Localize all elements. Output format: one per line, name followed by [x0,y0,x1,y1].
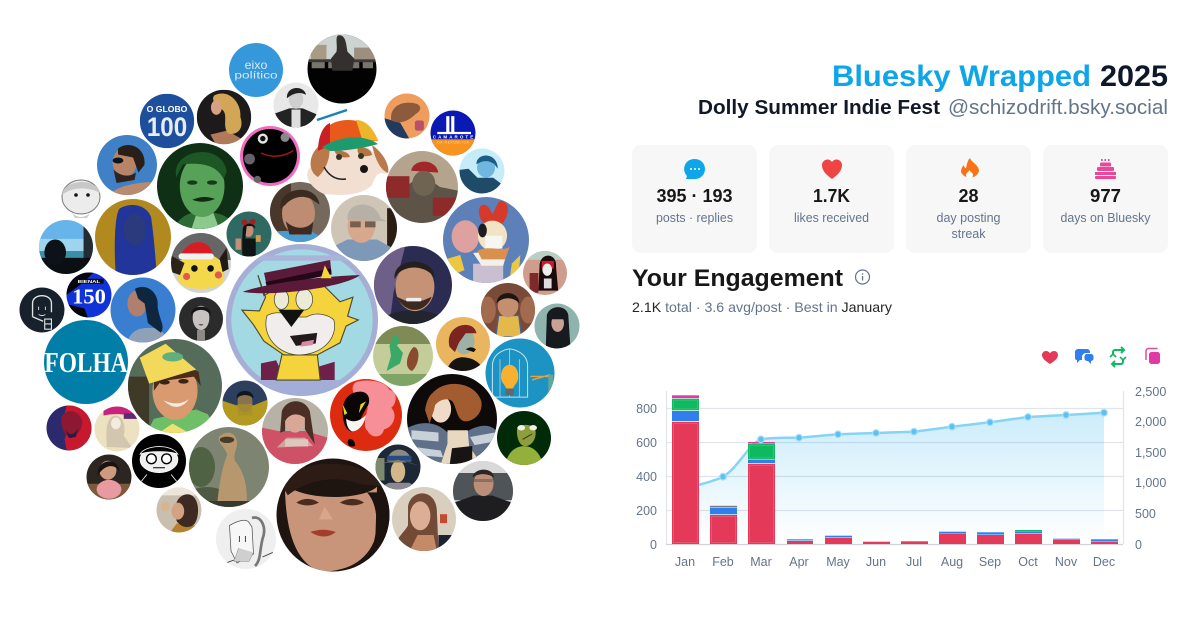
right axis labels: 500 [1135,507,1156,521]
avatar: dog with propeller cap [307,110,388,195]
icon: legend replies [1075,349,1094,364]
avatar: Camarote da Republica: CAMAROTE [433,134,473,139]
stat card: streak [906,145,1031,253]
stat card: streak: streak [952,226,986,241]
stat card: days on Bluesky: days on Bluesky [1060,210,1151,225]
avatar: Camarote da Republica [430,110,476,156]
avatar: pencil sketch of a man [216,509,276,569]
left axis labels: 800 [636,402,657,416]
icon: speech bubble [684,159,705,179]
icon: info [856,270,870,284]
stat card: likes: likes received [794,210,869,225]
avatar: green alien painting [373,326,433,386]
avatar: Pikachu with santa hat [171,233,231,293]
avatar: cartoon man with yellow hat [128,339,222,433]
avatar: engraving in red [386,151,458,223]
avatar: Kermit the frog [497,411,551,465]
avatar: O Globo 100: O GLOBO [147,104,188,114]
avatar: man with cap and glasses [331,195,397,261]
month labels: May [826,555,851,569]
avatar: girl with flowers [86,454,132,500]
avatar: eixo politico: político [234,70,278,81]
right axis labels: 2,000 [1135,415,1166,429]
month labels: Sep [979,555,1001,569]
avatar: red devil with pink flower [330,379,402,451]
icon: legend reposts [1110,347,1126,367]
avatar: woman in profile on blue sky [110,278,176,342]
month labels: Feb [712,555,734,569]
avatar: black and white portrait [274,82,318,128]
icon: cake [1095,159,1116,179]
display name and handle: @schizodrift.bsky.social [948,97,1168,119]
left axis labels: 200 [636,504,657,518]
avatar: capybara in suit [384,94,430,138]
stat card: streak: 28 [958,186,978,206]
inner bar highlights [674,400,774,542]
avatar: birdcage with light bulb [486,338,554,408]
avatar: O Globo 100: 100 [147,111,187,142]
stat card: streak: day posting [936,210,1000,225]
left axis labels: 600 [636,436,657,450]
avatar: eixo politico [229,43,283,97]
avatar: 150 logo [66,272,112,318]
right axis labels: 1,500 [1135,446,1166,460]
avatar: woman with red bow [226,212,272,256]
cumulative area [685,413,1104,544]
display name and handle [698,97,1168,119]
icon: legend quotes [1146,348,1160,364]
avatar: cartoon with glasses on black [132,434,186,488]
month labels: Aug [941,555,963,569]
avatar: Folha logo [44,320,128,404]
month labels: Dec [1093,555,1115,569]
stat card: likes [769,145,894,253]
avatar: anime sketch with pink top [94,406,140,452]
avatar bubble cluster [20,34,580,572]
month labels: Jun [866,555,886,569]
avatar: red and blue duotone man [46,406,92,450]
avatar: woman in pink shirt [262,398,328,464]
icon: flame [961,158,979,179]
month labels: Jul [906,555,922,569]
left axis labels: 0 [650,538,657,552]
avatar: man with glasses in jacket [453,461,513,521]
left axis labels [636,402,657,552]
avatar: blue 3D cartoon guy [460,148,504,194]
avatar: Camarote da Republica: DA REPÚBLICA [437,139,470,144]
stat card: days on Bluesky: 977 [1090,186,1121,206]
title: Bluesky Wrapped [832,60,1091,93]
avatar: Folha logo: FOLHA [44,348,128,379]
avatar: woman with auburn hair [407,374,497,464]
avatar: eixo politico: eixo [245,58,268,72]
avatar: woman eating [156,488,202,532]
icon: heart [822,160,842,179]
icon: legend heart [1042,351,1058,364]
avatar: old portrait with moustache [436,317,490,371]
right axis labels: 2,500 [1135,385,1166,399]
avatar: grim reaper cartoon [523,251,567,295]
right axis labels [1135,385,1166,552]
avatar: man in sunglasses [97,135,157,195]
right axis labels: 0 [1135,538,1142,552]
avatar: blue madonna on gold [95,199,171,275]
avatar: O Globo 100 [140,94,194,148]
stacked bars [672,395,1118,544]
month labels: Jan [675,555,695,569]
avatar: woman with dark bangs [534,304,580,348]
avatar: man with Brazil flag tint [222,380,268,426]
avatar: black blob with pink ring [240,126,300,186]
engagement summary text: 2.1K total · 3.6 avg/post · Best in January [632,299,892,315]
avatar: Top Cat [226,244,378,396]
stat card: days on Bluesky [1043,145,1168,253]
chart: monthly engagement and cumulative line [636,385,1166,569]
right axis labels: 1,000 [1135,476,1166,490]
month labels: Nov [1055,555,1078,569]
title: 2025 [1100,60,1168,93]
avatar: window with sea [39,220,93,274]
line points [720,409,1107,480]
avatar: black and white woman [179,297,223,341]
avatar: close-up woman with dark hair [276,458,390,572]
avatar: 150 logo: 150 [72,285,106,309]
stat card: posts and replies: 395 · 193 [656,186,732,206]
heading: Your Engagement: Your Engagement [632,265,843,292]
month labels [675,555,1115,569]
month labels: Oct [1018,555,1038,569]
month labels: Mar [750,555,772,569]
avatar: woman with long hair [392,487,456,551]
avatar: bearded young man [270,182,330,242]
avatar: kid with tank top [480,283,536,337]
stat card: posts and replies [632,145,757,253]
month labels: Apr [789,555,809,569]
chart legend icons [1042,347,1160,367]
left axis labels: 400 [636,470,657,484]
cumulative line [685,413,1104,489]
gridlines [666,391,1124,544]
avatar: person with hat [376,444,420,490]
stat card: likes: 1.7K [813,186,850,206]
avatar: cartoon rooster [443,197,529,283]
avatar: blonde woman [197,90,251,144]
avatar: grey cartoon child [62,180,100,218]
avatar: silhouette at balcony [308,34,376,104]
stat card: posts and replies: posts · replies [656,210,733,225]
display name and handle: Dolly Summer Indie Fest [698,97,940,119]
avatar: dark logo face [20,288,64,332]
avatar: 150 logo: BIENAL [78,279,100,285]
avatar: smiling bearded man [374,246,452,324]
avatar: green-tinted man [157,143,243,229]
avatar: meerkat [187,427,269,507]
